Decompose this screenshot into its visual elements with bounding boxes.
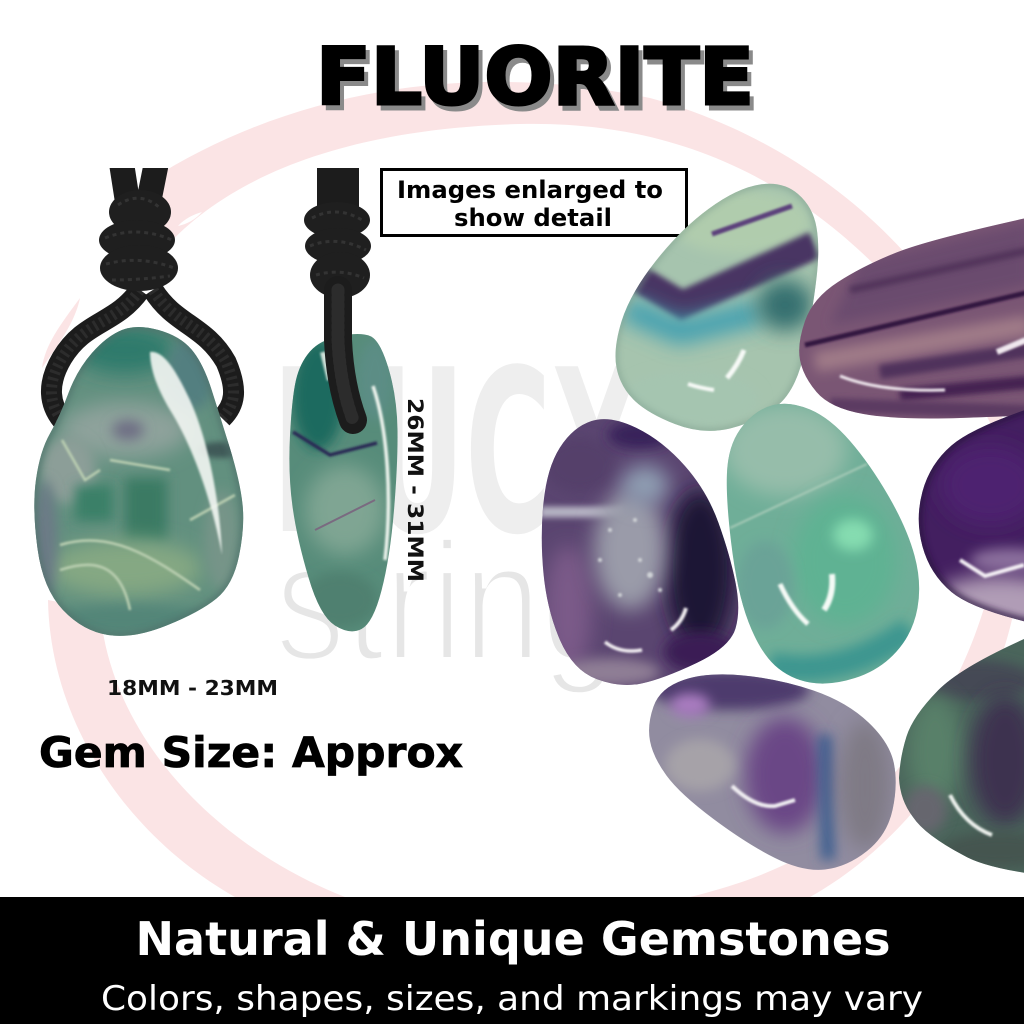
knot [304, 202, 371, 298]
footer subheading: Colors, shapes, sizes, and markings may vary [101, 979, 923, 1019]
stone center green [726, 404, 920, 684]
stones photo [535, 170, 1024, 880]
gem size heading: Gem Size: Approx [39, 728, 463, 777]
watermark logo text: DUCX [272, 322, 642, 585]
pink brush circle logo [42, 82, 1024, 897]
stone left purple [542, 419, 738, 685]
cord loops [51, 160, 234, 420]
watermark logo text [272, 322, 690, 697]
note: images enlarged: show detail [454, 204, 612, 232]
pendant side view [289, 168, 398, 632]
stone bottom purple [649, 674, 896, 870]
stone top green [616, 184, 818, 431]
pendant front view [34, 168, 244, 636]
footer heading: Natural & Unique Gemstones [136, 912, 890, 966]
gem [34, 327, 244, 636]
width label: 18MM - 23MM [107, 676, 278, 700]
footer banner [0, 897, 1024, 1024]
height label: 26MM - 31MM [403, 398, 427, 582]
note: images enlarged [382, 170, 686, 236]
knot [99, 190, 178, 291]
watermark logo text: strings [275, 507, 690, 697]
title: FLUORITE [316, 33, 754, 123]
note: images enlarged: Images enlarged to [397, 176, 663, 204]
title: FLUORITE [320, 38, 758, 128]
stone right purple [918, 410, 1024, 622]
cord through gem [338, 290, 353, 420]
stone top-right purple banded [799, 218, 1024, 418]
stone bottom right green [895, 630, 1024, 880]
